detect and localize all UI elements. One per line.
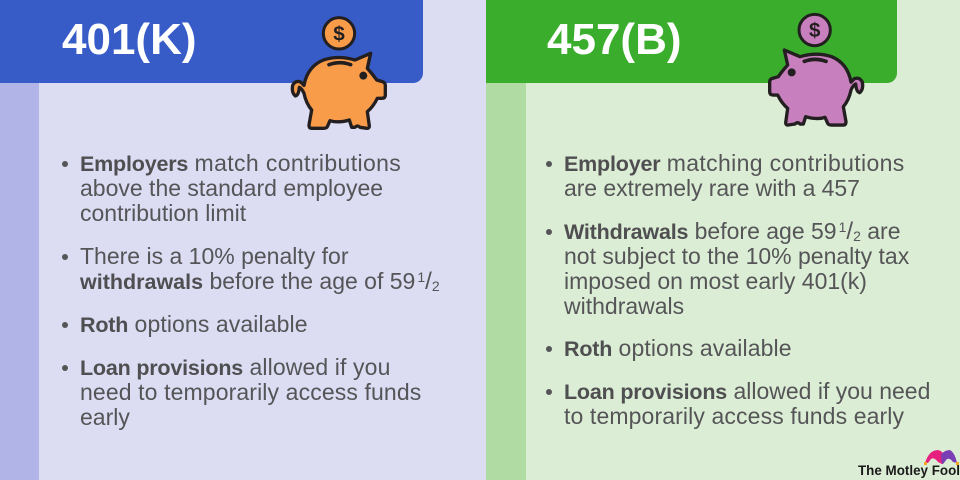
logo: The Motley Fool: [858, 450, 960, 478]
bullet: loan provisions: early: [80, 404, 130, 430]
bullet: Roth options: Roth options available: [564, 335, 792, 361]
bullet: withdrawal penalty: There is a 10% penalty for: [80, 243, 348, 269]
bullet: employer matching: [564, 151, 905, 201]
bullet: loan provisions: need to temporarily access funds: [80, 379, 421, 405]
side strip: 457(b): [486, 83, 526, 480]
logo wordmark: The Motley Fool: [858, 463, 960, 478]
bullet: Roth options: Roth options available: [80, 311, 308, 337]
bullet: withdrawal penalty: [80, 244, 440, 294]
bullet: loan provisions: Loan provisions allowed if you need: [564, 378, 930, 404]
bullet: withdrawals: imposed on most early 401(k): [564, 268, 867, 294]
bullet: loan provisions: Loan provisions allowed if you: [80, 354, 390, 380]
heading: 401(K): 401(K): [62, 15, 196, 64]
bullet: loan provisions: [80, 355, 421, 430]
icon: orange piggy bank: [292, 18, 385, 128]
header band: 401(k): [0, 0, 423, 83]
bullet: withdrawal penalty: withdrawals before the age of 591/2: [80, 268, 440, 295]
panel: 457(b): [486, 0, 960, 480]
heading: 457(B): 457(B): [547, 15, 682, 64]
icon: jester hat: [924, 450, 959, 465]
bullet: withdrawals: withdrawals: [564, 293, 684, 319]
panel: 401(k): [0, 0, 486, 480]
bullet: employers match: Employers match contributions: [80, 150, 401, 176]
bullet: employers match: above the standard employee: [80, 175, 383, 201]
bullet: withdrawals: [564, 219, 909, 319]
bullet: employer matching: Employer matching contributions: [564, 150, 905, 176]
bullet: withdrawals: Withdrawals before age 591/2 are: [564, 218, 900, 245]
bullet: loan provisions: to temporarily access funds early: [564, 403, 904, 429]
icon: purple piggy bank: $: [809, 19, 821, 42]
icon: purple piggy bank: [770, 14, 863, 125]
bullet: employers match: contribution limit: [80, 200, 246, 226]
bullet: employers match: [80, 151, 401, 226]
side strip: 401(k): [0, 83, 39, 480]
icon: orange piggy bank: $: [333, 23, 345, 46]
bullet: withdrawals: not subject to the 10% penalty tax: [564, 243, 909, 269]
bullet: loan provisions: [564, 379, 930, 429]
bullet: employer matching: are extremely rare with a 457: [564, 175, 860, 201]
header band: 457(b): [486, 0, 897, 83]
